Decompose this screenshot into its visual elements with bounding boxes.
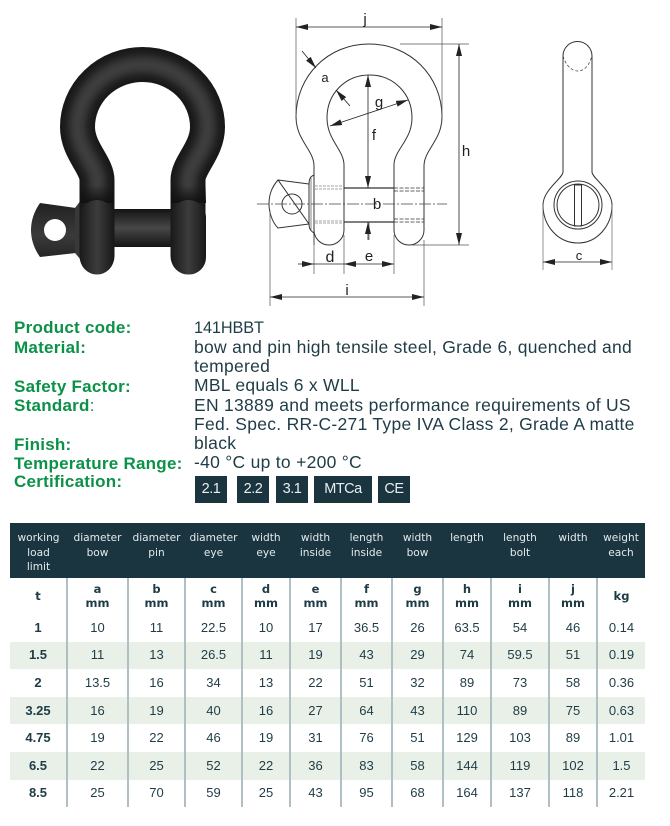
spec values: -40 °C up to +200 °C (194, 452, 362, 472)
specification table: 58 (410, 758, 425, 773)
dimension h: h (462, 143, 470, 160)
specification table (10, 523, 645, 807)
specification table: 89 (460, 675, 474, 690)
spec labels: Material: (14, 338, 86, 357)
specification table: 36 (308, 758, 323, 773)
certification badges (195, 476, 410, 503)
specification table: 89 (513, 703, 527, 718)
specification table: 59 (206, 785, 221, 800)
specification table: 36.5 (354, 620, 379, 635)
specification table: 103 (509, 730, 531, 745)
specification table: 0.36 (609, 675, 634, 690)
specification table: d (262, 582, 270, 596)
specification table: 95 (359, 785, 374, 800)
specification table: 11 (91, 647, 104, 662)
specification table: 13 (259, 675, 273, 690)
specification table: 13 (149, 647, 164, 662)
dimension e: e (365, 248, 373, 265)
specification table: 25 (149, 758, 164, 773)
specification table: 19 (90, 730, 105, 745)
specification table: j (571, 582, 575, 596)
specification table: 10 (259, 620, 273, 635)
specification table: 110 (457, 703, 477, 718)
specification table: mm (254, 596, 278, 610)
specification table: each (608, 546, 634, 558)
specification table: kg (614, 588, 629, 602)
dimension j: j (362, 11, 367, 28)
specification table: 2.21 (609, 785, 634, 800)
specification table: 164 (456, 785, 478, 800)
spec values: bow and pin high tensile steel, Grade 6, quenched and (194, 337, 632, 357)
specification table: eye (256, 546, 276, 558)
specification table: mm (455, 596, 479, 610)
specification table: g (413, 582, 422, 596)
specification table: 26.5 (201, 647, 226, 662)
centre line (257, 203, 447, 205)
specification table: 0.14 (609, 620, 634, 635)
specification table: mm (145, 596, 168, 610)
specification table: 17 (308, 620, 323, 635)
dimension i: i (345, 282, 349, 299)
specification table: 1 (34, 620, 42, 635)
specification table: inside (351, 546, 382, 558)
specification table: b (152, 582, 161, 596)
specification table: length (450, 532, 484, 544)
specification table: 74 (460, 647, 474, 662)
shackle outline (269, 44, 442, 245)
spec values (194, 319, 635, 472)
specification table: 22 (149, 730, 164, 745)
dimension c: c (576, 248, 583, 263)
specification table: 68 (410, 785, 425, 800)
specification table: 19 (149, 703, 164, 718)
specification table: 51 (410, 730, 425, 745)
dimension f (368, 75, 377, 188)
specification table: t (35, 588, 41, 602)
specification table: 64 (359, 703, 374, 718)
specification table: 22 (308, 675, 323, 690)
specification table: bolt (510, 546, 530, 558)
specification table: eye (204, 546, 223, 558)
specification table: 22 (90, 758, 105, 773)
specification table: pin (148, 546, 165, 558)
specification table: length (503, 532, 537, 544)
specification table: 1.5 (612, 758, 631, 773)
specification table: 22 (259, 758, 273, 773)
specification table: 51 (359, 675, 374, 690)
specification table: weight (603, 532, 639, 544)
specification table: 34 (206, 675, 221, 690)
specification table: 43 (359, 647, 374, 662)
certification badges: 2.1 (202, 481, 220, 497)
specification table: 11 (150, 620, 163, 635)
photo: black bow shackle (31, 47, 225, 274)
dimension g (330, 94, 408, 126)
specification table: 46 (206, 730, 221, 745)
specification table: mm (355, 596, 378, 610)
specification table: i (518, 582, 522, 596)
specification table: mm (561, 596, 585, 610)
spec labels: Safety Factor: (14, 377, 131, 396)
pin (112, 209, 172, 247)
specification table: 76 (359, 730, 374, 745)
specification table: 27 (308, 703, 323, 718)
specification table: 40 (206, 703, 221, 718)
specification table: bow (87, 546, 108, 558)
specification table: length (350, 532, 383, 544)
spec values: black (194, 433, 236, 453)
bow (78, 65, 208, 256)
specification table: mm (508, 596, 532, 610)
specification table: 51 (566, 647, 580, 662)
spec values: Fed. Spec. RR-C-271 Type IVA Class 2, Grade A matte (194, 414, 635, 434)
spec values: MBL equals 6 x WLL (194, 375, 360, 395)
specification table: 70 (149, 785, 164, 800)
certification badges: 3.1 (283, 481, 301, 497)
specification table: width (251, 532, 281, 544)
specification table: diameter (73, 532, 122, 544)
specification table: 89 (566, 730, 580, 745)
certification badges: 2.2 (244, 481, 262, 497)
specification table: 10 (90, 620, 105, 635)
specification table: mm (86, 596, 109, 610)
dimension a: a (321, 70, 329, 85)
specification table: 31 (308, 730, 323, 745)
specification table: 119 (510, 758, 530, 773)
specification table: 1.01 (609, 730, 634, 745)
dimension d: d (326, 249, 334, 266)
specification table: a (94, 582, 101, 596)
specification table: 46 (566, 620, 580, 635)
specification table: 144 (456, 758, 478, 773)
specification table: mm (406, 596, 429, 610)
specification table: width (301, 532, 330, 544)
specification table: 0.19 (609, 647, 634, 662)
specification table: 4.75 (25, 730, 51, 745)
leg ends (80, 185, 206, 274)
specification table: mm (304, 596, 327, 610)
specification table: 16 (149, 675, 164, 690)
dimension b (368, 196, 381, 240)
specification table: load (27, 546, 50, 558)
specification table: 129 (456, 730, 478, 745)
specification table: diameter (132, 532, 181, 544)
certification badges: MTCa (324, 481, 362, 497)
dimension e (344, 248, 394, 265)
dimension a (302, 51, 350, 106)
specification table: 25 (90, 785, 105, 800)
specification table: 11 (259, 647, 273, 662)
dimension b: b (373, 196, 381, 213)
certification badges: CE (384, 481, 404, 497)
specification table: 63.5 (454, 620, 480, 635)
specification table: 59.5 (507, 647, 533, 662)
specification table: 1.5 (29, 647, 47, 662)
specification table: 6.5 (29, 758, 47, 773)
specification table: limit (27, 561, 50, 573)
dimension c (543, 205, 612, 270)
extension lines (270, 18, 469, 306)
specification table: 2 (34, 675, 42, 690)
spec labels (14, 318, 183, 491)
spec labels: Product code: (14, 318, 132, 337)
specification table: 43 (308, 785, 323, 800)
dimension f: f (372, 127, 377, 144)
spec labels: Certification: (14, 472, 122, 491)
specification table: bow (407, 546, 428, 558)
dimension d (298, 249, 344, 266)
spec values: EN 13889 and meets performance requirements of US (194, 395, 631, 415)
specification table: e (312, 582, 319, 596)
specification table: 19 (308, 647, 323, 662)
specification table: diameter (189, 532, 238, 544)
specification table: 19 (259, 730, 273, 745)
specification table: 118 (563, 785, 583, 800)
specification table: 16 (259, 703, 273, 718)
specification table: 58 (566, 675, 580, 690)
specification table: c (210, 582, 217, 596)
specification table: 16 (90, 703, 105, 718)
specification table: 102 (562, 758, 584, 773)
spec values: tempered (194, 356, 270, 376)
specification table: width (558, 532, 588, 544)
specification table: working (17, 532, 60, 544)
specification table: 22.5 (201, 620, 226, 635)
eye of bolt (31, 200, 81, 260)
technical drawing: front view with dimensions (257, 11, 470, 306)
specification table: 43 (410, 703, 425, 718)
spec labels: Finish: (14, 435, 71, 454)
technical drawing: side view (542, 41, 612, 270)
specification table: 13.5 (85, 675, 110, 690)
specification table: 75 (566, 703, 580, 718)
specification table: 3.25 (25, 703, 51, 718)
spec labels: Standard: (14, 396, 95, 415)
specification table: 52 (206, 758, 221, 773)
specification table: width (403, 532, 432, 544)
specification table: mm (202, 596, 225, 610)
specification table: inside (300, 546, 331, 558)
specification table: 29 (410, 647, 425, 662)
spec labels: Temperature Range: (14, 454, 183, 473)
specification table: 83 (359, 758, 374, 773)
specification table: 8.5 (29, 785, 47, 800)
specification table: 25 (259, 785, 273, 800)
spec values: 141HBBT (194, 319, 264, 337)
specification table: f (364, 582, 369, 596)
specification table: 32 (410, 675, 425, 690)
specification table: h (463, 582, 471, 596)
dimension g: g (375, 94, 383, 111)
specification table: 54 (513, 620, 527, 635)
specification table: 73 (513, 675, 527, 690)
specification table: 26 (410, 620, 425, 635)
specification table: 137 (509, 785, 531, 800)
specification table: 0.63 (609, 703, 634, 718)
